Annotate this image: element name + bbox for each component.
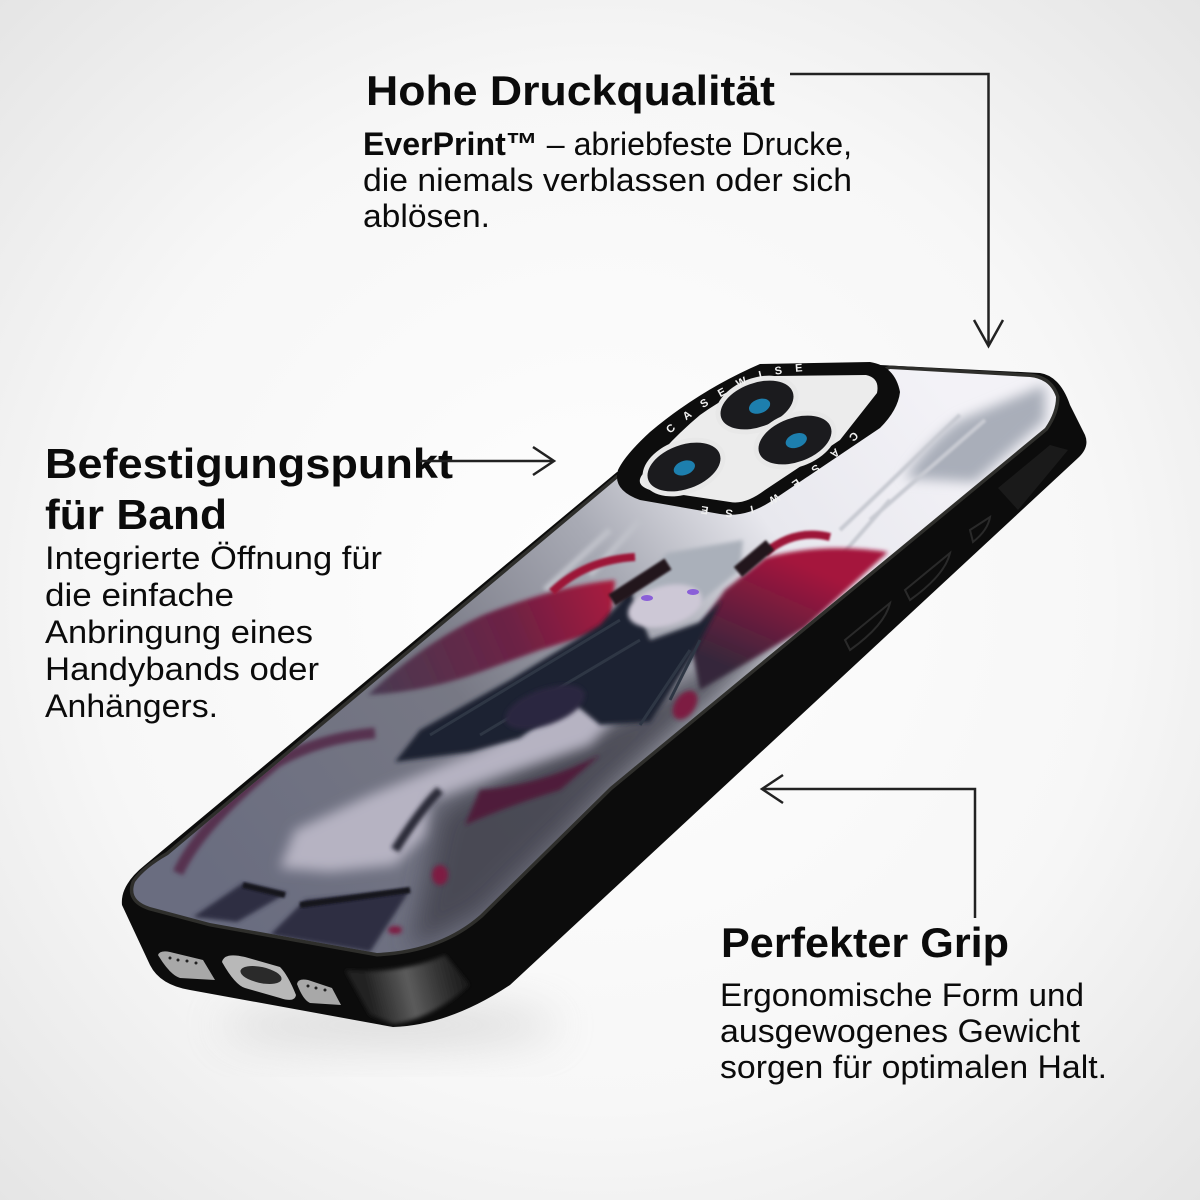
- artwork: crimson streak: [465, 755, 600, 825]
- speaker right dots: [306, 984, 326, 992]
- body text: Ergonomische Form und: [720, 977, 1084, 1013]
- body text: EverPrint™ – abriebfeste Drucke,: [363, 126, 852, 162]
- callout: print quality: [363, 67, 852, 234]
- body text: sorgen für optimalen Halt.: [720, 1049, 1107, 1085]
- lens right: [745, 400, 845, 480]
- callout: grip: [720, 919, 1107, 1085]
- arrow: grip: [762, 775, 975, 918]
- case rim: [133, 369, 1056, 953]
- artwork: silver hair: [654, 538, 744, 599]
- body text: Integrierte Öffnung für: [45, 540, 382, 576]
- arrow: strap attachment: [420, 447, 554, 475]
- artwork: face: [624, 583, 703, 630]
- case logo text top: CASEWISE: [666, 364, 802, 432]
- artwork: dark diagonal band: [395, 790, 440, 850]
- bottom ports: [158, 951, 341, 1005]
- artwork: crimson arcs: [552, 535, 830, 592]
- speaker left dots: [168, 956, 198, 964]
- artwork: shaded ground: [410, 620, 800, 950]
- artwork: right crimson mass: [690, 548, 888, 690]
- artwork: left crimson band: [368, 580, 615, 695]
- artwork: railing: [838, 414, 986, 550]
- body text: die niemals verblassen oder sich: [363, 162, 852, 198]
- body text: Handybands oder: [45, 651, 319, 687]
- phone case: [122, 362, 1086, 1028]
- phone shadow: [220, 1005, 560, 1045]
- artwork: lower dark trim: [243, 885, 410, 905]
- callout: strap attachment: [45, 440, 453, 724]
- side buttons: [845, 445, 1068, 650]
- body text: [45, 540, 382, 724]
- camera bump: [617, 362, 900, 518]
- case lower corner highlight: [345, 955, 470, 1024]
- body text: [720, 977, 1107, 1085]
- artwork: crimson spots: [388, 686, 702, 934]
- body text: die einfache: [45, 577, 234, 613]
- body text: ausgewogenes Gewicht: [720, 1013, 1080, 1049]
- artwork: headpiece: [612, 545, 770, 600]
- body text: ablösen.: [363, 198, 490, 234]
- artwork: pale abstract form: [280, 695, 630, 872]
- artwork: hair strands: [430, 620, 700, 735]
- arrow: print quality: [790, 74, 1003, 346]
- speaker left: [158, 951, 215, 980]
- callout: strap attachment: für Band: [45, 491, 227, 538]
- usb port: [222, 955, 296, 1000]
- case body: [122, 365, 1086, 1027]
- bump frame: [617, 362, 900, 515]
- artwork: background haze: [542, 530, 628, 592]
- body text: Anbringung eines: [45, 614, 313, 650]
- heading: Hohe Druckqualität: [366, 67, 775, 114]
- artwork: tower: [905, 385, 1045, 482]
- artwork: dark lower forms: [193, 883, 410, 952]
- heading: Perfekter Grip: [721, 919, 1009, 966]
- artwork: lower tentacle: [178, 733, 375, 873]
- artwork: eyes: [641, 589, 699, 601]
- case logo text bottom: CASEWISE: [701, 432, 858, 518]
- body text: Anhängers.: [45, 688, 218, 724]
- speaker right: [297, 980, 341, 1005]
- artwork: dark garment form: [506, 684, 584, 732]
- camera window: [640, 375, 878, 502]
- body text: [363, 126, 852, 234]
- heading: Befestigungspunkt: [45, 440, 453, 487]
- artwork: dark hair mass: [395, 590, 722, 762]
- lens top: [707, 365, 807, 445]
- lens left: [634, 427, 734, 507]
- phone artwork: [133, 369, 1056, 953]
